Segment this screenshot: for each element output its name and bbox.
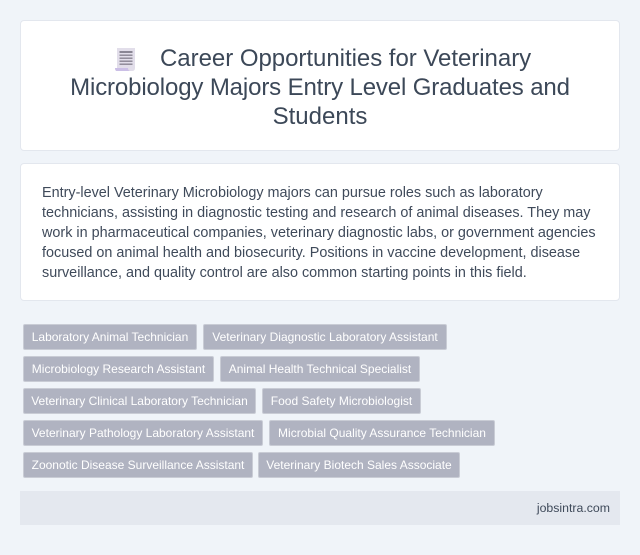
description text: focused on animal health and biosecurity. Positions in vaccine development, disease <box>42 244 580 260</box>
tag: Veterinary Clinical Laboratory Technician <box>31 394 248 408</box>
panel: description <box>20 163 620 301</box>
tag <box>258 452 460 478</box>
panel: title <box>20 20 620 151</box>
tag: Animal Health Technical Specialist <box>229 362 411 376</box>
tag: Veterinary Diagnostic Laboratory Assistant <box>212 330 438 344</box>
description text: work in pharmaceutical companies, veterinary diagnostic labs, or government agencies <box>42 224 596 240</box>
title text <box>70 45 570 130</box>
tag: Microbial Quality Assurance Technician <box>278 426 486 440</box>
tag: Microbiology Research Assistant <box>32 362 205 376</box>
tag <box>262 388 421 414</box>
tag <box>23 452 253 478</box>
tag <box>23 420 263 446</box>
tag <box>269 420 495 446</box>
description text: technicians, assisting in diagnostic testing and research of animal diseases. They may <box>42 204 590 220</box>
description text: Entry-level Veterinary Microbiology majors can pursue roles such as laboratory <box>42 184 543 200</box>
title text: Career Opportunities for Veterinary <box>160 45 531 72</box>
tag <box>23 388 256 414</box>
tag: Food Safety Microbiologist <box>271 394 412 408</box>
icon: paper scroll <box>115 48 135 71</box>
tag <box>23 356 214 382</box>
tag: Zoonotic Disease Surveillance Assistant <box>32 458 244 472</box>
description text: surveillance, and quality control are also common starting points in this field. <box>42 264 527 280</box>
tag <box>203 324 447 350</box>
footer source text: jobsintra.com <box>537 501 610 515</box>
tag: Laboratory Animal Technician <box>32 330 188 344</box>
tag <box>220 356 420 382</box>
title text: Microbiology Majors Entry Level Graduates and <box>70 74 570 101</box>
description text <box>42 184 596 280</box>
tags: job titles <box>23 324 495 478</box>
footer bar <box>20 491 620 525</box>
tag: Veterinary Biotech Sales Associate <box>266 458 452 472</box>
title text: Students <box>273 103 367 130</box>
tag: Veterinary Pathology Laboratory Assistant <box>32 426 254 440</box>
tag <box>23 324 197 350</box>
